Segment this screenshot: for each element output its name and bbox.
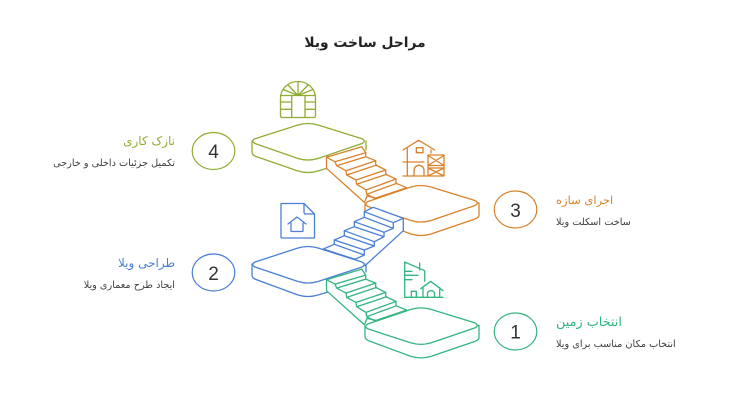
step 2 label (84, 256, 175, 291)
icon: arched window (280, 82, 316, 118)
step 3 label: ساخت اسکلت ویلا (556, 217, 631, 228)
platform 2: blue (252, 246, 366, 296)
icon: buildings with small house (405, 262, 443, 297)
step 4 label (53, 134, 175, 169)
step 2 number: 2 (208, 264, 219, 285)
icon: document with house (281, 204, 314, 238)
stairs: green from step 2 to step 1 (326, 269, 407, 325)
title: مراحل ساخت ویلا (304, 35, 426, 51)
step 2 label: طراحی ویلا (118, 256, 175, 271)
step 1 number (494, 313, 537, 350)
platform 1: green bottom (365, 308, 479, 358)
step 1 number: 1 (510, 322, 521, 344)
step 1 label (556, 315, 676, 350)
step 1 label: انتخاب زمین (556, 315, 622, 330)
stairs: orange from step 4 to step 3 (326, 147, 407, 202)
step 4 number (192, 132, 235, 170)
step 3 number: 3 (510, 201, 521, 222)
stairs: blue from step 3 to step 2 (323, 207, 403, 266)
step 2 label: ایجاد طرح معماری ویلا (84, 280, 175, 291)
step 3 label (556, 193, 631, 228)
step 3 label: اجرای سازه (556, 193, 613, 208)
step 3 number (494, 191, 537, 228)
icon: house with scaffolding (403, 140, 444, 176)
step 4 label: تکمیل جزئیات داخلی و خارجی (53, 158, 175, 169)
step 1 label: انتخاب مکان مناسب برای ویلا (556, 339, 676, 350)
platform 4: green top (252, 124, 366, 172)
step 4 number: 4 (208, 142, 219, 163)
step 2 number (192, 254, 235, 291)
step 4 label: نازک کاری (123, 134, 175, 149)
platform 3: orange (365, 186, 479, 236)
